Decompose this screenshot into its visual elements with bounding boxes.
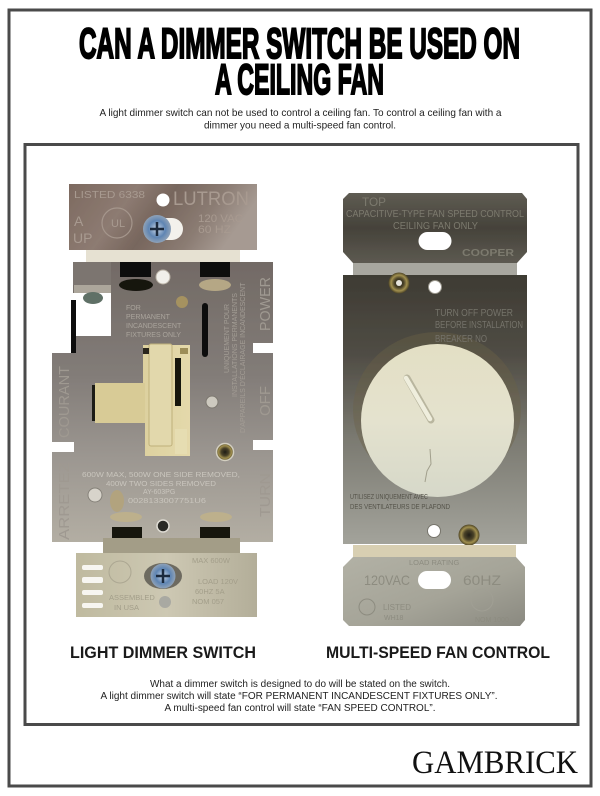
rating label: 400W TWO SIDES REMOVED: [106, 481, 216, 488]
rocker toggle: [92, 344, 190, 456]
explanation text: A light dimmer switch will state “FOR PERMANENT INCANDESCENT FIXTURES ONLY”.: [100, 691, 497, 702]
bottom plate lettering: NOM 1000: [475, 617, 509, 624]
top plate lettering: UL: [111, 218, 125, 230]
edge lettering: [56, 277, 274, 540]
multi-speed fan control photo: [343, 193, 527, 626]
top mounting plate: [69, 184, 257, 250]
lower rivet: [88, 488, 102, 502]
bottom bevel: [103, 538, 240, 553]
top plate lettering: CEILING FAN ONLY: [393, 221, 478, 232]
top left tab: [73, 262, 111, 285]
panel: switch comparison: [25, 144, 578, 724]
bottom plate lettering: [109, 556, 238, 612]
brand logo: GAMBRICK: [412, 745, 578, 781]
upper body hole: [156, 270, 170, 284]
title: A CEILING FAN: [215, 56, 384, 104]
bottom plate lettering: IN USA: [114, 603, 139, 612]
rotary knob: [361, 344, 514, 497]
lower body lettering: [350, 494, 450, 511]
UL mark: [102, 208, 132, 238]
top bevel: [86, 250, 240, 262]
vertical French label: [224, 282, 247, 433]
bottom screw cross: [156, 569, 170, 583]
main metal body: [52, 262, 273, 542]
fixture label: FIXTURES ONLY: [126, 332, 181, 339]
rating label: AY-603PG: [143, 489, 175, 496]
tab lip: [74, 285, 111, 293]
top plate slot: [418, 232, 452, 250]
body rivet: [206, 396, 218, 408]
top plate lettering: COOPER: [462, 248, 515, 259]
knob pointer highlight: [406, 378, 430, 419]
bottom plate lettering: LOAD 120V: [198, 577, 238, 586]
tab screw: [83, 292, 103, 304]
title: [79, 20, 520, 104]
bottom plate slot: [418, 571, 451, 589]
top plate lettering: 60 HZ: [198, 224, 231, 236]
explanation text: What a dimmer switch is designed to do will be stated on the switch.: [150, 679, 450, 690]
bottom plate lettering: 60HZ 5A: [195, 587, 225, 596]
bottom mounting plate: [76, 553, 257, 617]
bottom screw: [144, 563, 182, 589]
lower body hole: [157, 520, 169, 532]
tan rivet: [176, 296, 188, 308]
upper brass eyelet: [388, 272, 410, 294]
bottom hole: [159, 596, 171, 608]
warning lettering: BEFORE INSTALLATION: [435, 320, 523, 331]
top plate lettering: [73, 189, 249, 246]
brass eyelet: [216, 444, 234, 460]
tan oval: [110, 490, 124, 512]
upper terminals: [119, 262, 231, 291]
warning lettering: [435, 308, 523, 345]
lower body lettering: UTILISEZ UNIQUEMENT AVEC: [350, 494, 428, 501]
vertical French label: D'APPAREILS D'ÉCLAIRAGE INCANDESCENT: [238, 282, 247, 433]
warning lettering: TURN OFF POWER: [435, 308, 513, 319]
top plate hole: [156, 194, 170, 206]
top plate screw slot cross: [150, 222, 164, 236]
edge lettering: TURN: [257, 473, 274, 517]
vertical French label: INSTALLATIONS PERMANENTS: [232, 293, 239, 397]
lower tabs and terminals: [110, 512, 232, 542]
left dark slit: [71, 300, 76, 353]
bottom plate lettering: NOM 057: [192, 597, 224, 606]
bottom plate lettering: MAX 600W: [192, 556, 231, 565]
top plate lettering: A: [74, 213, 84, 229]
top plate lettering: CAPACITIVE-TYPE FAN SPEED CONTROL: [346, 209, 524, 220]
rating label: [82, 472, 240, 505]
top plate lettering: [346, 195, 524, 259]
bottom plate lettering: 120VAC: [364, 572, 410, 588]
rating label: 600W MAX, 500W ONE SIDE REMOVED,: [82, 472, 240, 479]
light dimmer switch photo: [52, 184, 274, 617]
vertical French label: UNIQUEMENT POUR: [224, 304, 231, 373]
upper hole: [428, 280, 442, 294]
intro text: A light dimmer switch can not be used to control a ceiling fan. To control a ceiling fan with a: [100, 108, 502, 119]
fixture label: [126, 305, 182, 339]
top plate lettering: TOP: [362, 195, 386, 209]
top plate lettering: LISTED 6338: [74, 189, 145, 201]
warning lettering: BREAKER NO: [435, 334, 487, 345]
lower hole: [428, 524, 440, 538]
intro text: dimmer you need a multi-speed fan control.: [204, 120, 396, 132]
lower brass eyelet: [458, 524, 480, 546]
explanation text: A multi-speed fan control will state “FAN SPEED CONTROL”.: [164, 703, 436, 714]
intro text: [100, 108, 502, 132]
bottom plate lettering: ASSEMBLED: [109, 593, 155, 602]
knob pointer: [407, 378, 431, 420]
bottom screw head: [150, 564, 176, 588]
top plate screw slot: [150, 218, 183, 240]
top plate lettering: UP: [73, 230, 92, 246]
explanation text: [100, 679, 497, 714]
bottom bevel: [353, 545, 516, 557]
fixture label: FOR: [126, 305, 141, 312]
top plate lettering: 120 VAC: [198, 213, 243, 225]
rating label: 0028133007751U6: [128, 498, 206, 505]
bottom plate lettering: LOAD RATING: [409, 558, 459, 567]
upper eyelet centre: [396, 280, 402, 286]
edge lettering: OFF: [257, 386, 274, 416]
bottom mounting plate: [343, 557, 525, 626]
top plate lettering: LUTRON: [173, 189, 249, 210]
bottom plate lettering: [359, 558, 509, 624]
top mounting plate: [343, 193, 527, 263]
fixture label: PERMANENT: [126, 314, 171, 321]
knob shadow halo: [353, 332, 521, 488]
vent bars: [82, 565, 103, 608]
edge lettering: ARRETEZ: [56, 462, 73, 540]
fixture label: INCANDESCENT: [126, 323, 182, 330]
edge lettering: COURANT: [56, 366, 73, 438]
lower body lettering: DES VENTILATEURS DE PLAFOND: [350, 504, 450, 511]
bottom plate lettering: 60HZ: [463, 572, 501, 588]
bottom plate lettering: WH18: [384, 615, 404, 622]
edge lettering: POWER: [257, 277, 274, 331]
top plate screw: [143, 215, 171, 243]
bottom plate lettering: LISTED: [383, 603, 411, 612]
knob crack: [425, 449, 431, 482]
main metal body: [343, 275, 527, 544]
top bevel: [353, 263, 517, 275]
label: multi-speed fan control: MULTI-SPEED FAN CONTROL: [326, 644, 550, 662]
vertical slit: [202, 303, 208, 357]
label: light dimmer switch: LIGHT DIMMER SWITCH: [70, 644, 256, 662]
